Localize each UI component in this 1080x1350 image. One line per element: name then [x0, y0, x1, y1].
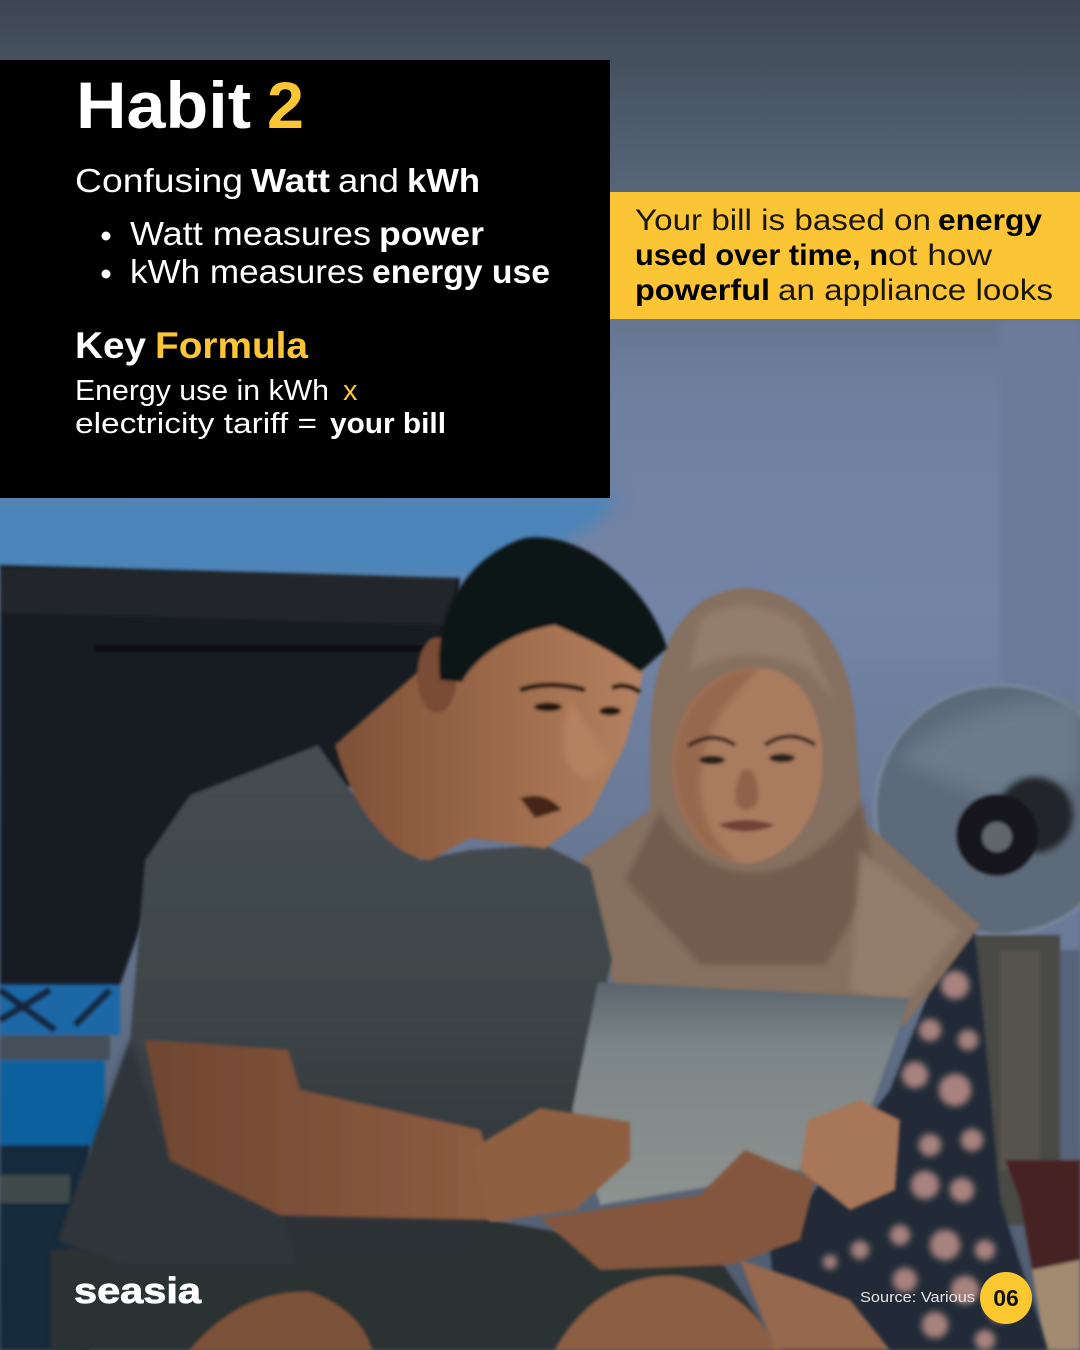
face	[672, 668, 822, 863]
bullet: kwh: energy use	[372, 253, 550, 290]
callout: yellow banner: Your bill is based on	[635, 204, 931, 237]
heading: key formula: Key	[75, 325, 146, 366]
bullet: watt: Watt measures	[130, 215, 371, 252]
hands	[470, 1100, 900, 1350]
subheading: and	[338, 162, 399, 199]
page number badge	[980, 1272, 1032, 1324]
callout: yellow banner: used over time, n	[635, 239, 888, 272]
bullet: kwh: kWh measures	[130, 253, 364, 290]
heading number: 2	[267, 68, 304, 142]
callout: yellow banner: energy	[938, 204, 1042, 237]
man	[50, 537, 780, 1350]
fan and chair	[875, 685, 1080, 1350]
paper sheet	[572, 982, 910, 1205]
subheading: Confusing	[75, 162, 243, 199]
formula line 1: x	[343, 375, 358, 407]
television	[0, 565, 460, 1350]
bullet: watt	[102, 215, 484, 252]
bullet: kwh	[102, 253, 550, 290]
formula line 2: electricity tariff =	[75, 408, 317, 440]
thigh right	[555, 1276, 780, 1350]
bullet: watt: power	[379, 215, 484, 252]
callout: yellow banner: an appliance looks	[778, 274, 1053, 307]
hijab	[580, 588, 980, 1025]
callout: yellow banner: ot how	[888, 239, 992, 272]
heading: key formula: Formula	[155, 325, 308, 366]
callout: yellow banner: powerful	[635, 274, 770, 307]
thigh left	[190, 1292, 372, 1350]
formula line 1: Energy use in kWh	[75, 375, 329, 407]
heading: Habit 2: Habit	[76, 68, 251, 142]
subheading: kWh	[407, 162, 480, 199]
logo: seasia: seasia	[74, 1270, 202, 1311]
callout: yellow banner	[610, 192, 1080, 319]
shorts	[50, 1215, 780, 1350]
dress	[770, 930, 1048, 1350]
panel: habit text box	[0, 60, 610, 498]
neck and head	[335, 590, 645, 860]
page number badge: 06	[993, 1285, 1019, 1311]
forearm	[145, 1040, 510, 1220]
source note: Source: Various	[860, 1289, 975, 1306]
shirt	[58, 745, 612, 1265]
formula line 2: your bill	[330, 408, 446, 440]
hair	[439, 537, 667, 682]
woman	[580, 588, 1048, 1350]
subheading: Watt	[251, 162, 330, 199]
